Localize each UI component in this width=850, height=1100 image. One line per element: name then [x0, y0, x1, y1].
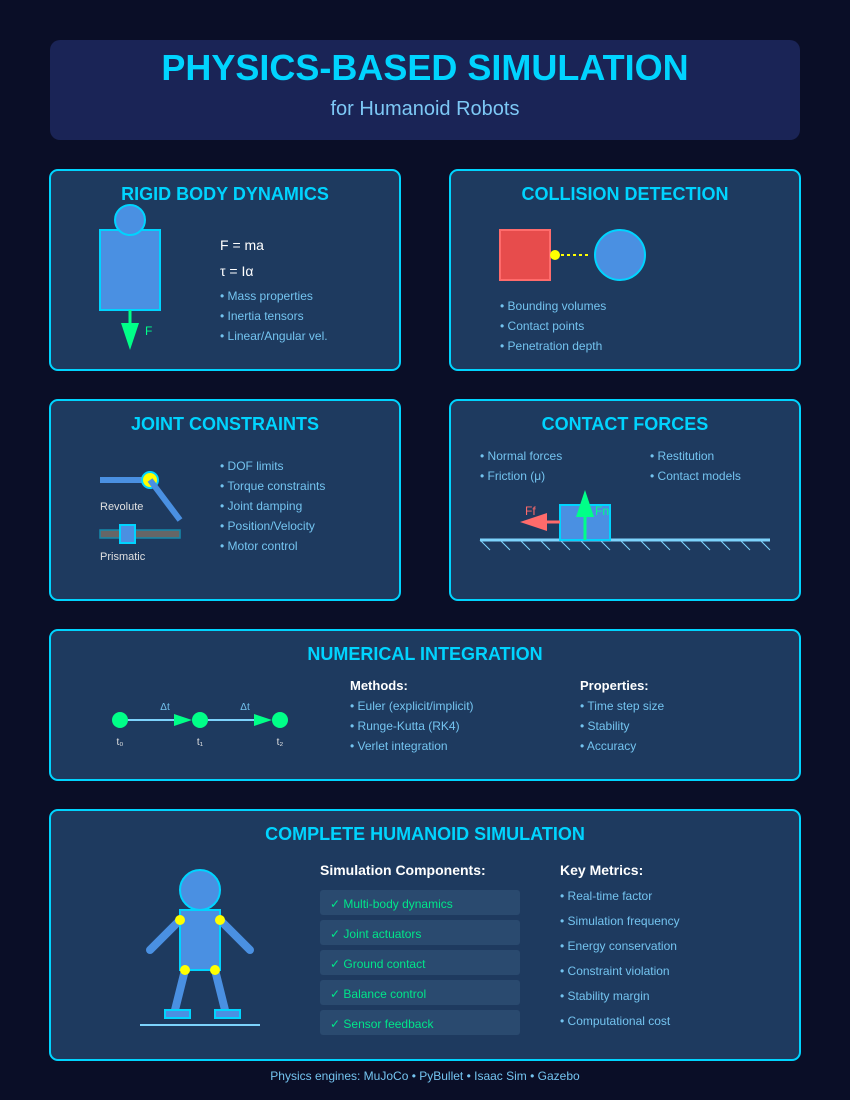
footer: Physics engines: MuJoCo • PyBullet • Isaac Sim • Gazebo	[270, 1069, 580, 1083]
bullet list: rigid body properties: • Inertia tensors	[220, 309, 304, 323]
checklist: simulation components: ✓ Ground contact	[330, 957, 426, 971]
diagram: integration time steps: t₁	[197, 737, 204, 748]
checklist: simulation components: ✓ Sensor feedback	[330, 1017, 434, 1031]
text block: key metrics: • Constraint violation	[560, 964, 670, 978]
text block: methods: • Euler (explicit/implicit)	[350, 699, 474, 713]
text block: methods	[350, 678, 474, 753]
bullet list: rigid body properties	[220, 289, 328, 343]
icon: prismatic joint	[100, 525, 180, 563]
diagram: block on ground with forces	[480, 490, 770, 550]
header banner	[50, 40, 800, 140]
text block: key metrics	[560, 862, 680, 1028]
bullet list: joints	[220, 459, 325, 553]
bullet list: contact right: • Restitution	[650, 449, 714, 463]
bullet list: rigid body properties: • Mass properties	[220, 289, 313, 303]
checklist: simulation components: ✓ Balance control	[330, 987, 426, 1001]
text block: key metrics: • Real-time factor	[560, 889, 652, 903]
diagram: integration time steps: Δt	[160, 702, 170, 713]
bullet list: joints: • Torque constraints	[220, 479, 325, 493]
icon: rigid body with force arrow	[100, 205, 160, 350]
panel: collision detection	[450, 170, 800, 370]
icon: humanoid robot figure	[140, 870, 260, 1025]
bullet list: joints: • Motor control	[220, 539, 298, 553]
text block: methods: • Verlet integration	[350, 739, 448, 753]
bullet list: contact left	[480, 449, 562, 483]
bullet list: joints: • Position/Velocity	[220, 519, 315, 533]
text block: key metrics: • Simulation frequency	[560, 914, 680, 928]
text block: key metrics: • Energy conservation	[560, 939, 677, 953]
diagram: integration time steps	[112, 702, 288, 748]
text block: properties: • Time step size	[580, 699, 665, 713]
panel: joint constraints	[50, 400, 400, 600]
heading: numerical integration: NUMERICAL INTEGRATION	[307, 644, 543, 664]
heading: contact forces: CONTACT FORCES	[542, 414, 708, 434]
heading: joint constraints: JOINT CONSTRAINTS	[131, 414, 319, 434]
text block: methods: Methods:	[350, 678, 408, 693]
panel: numerical integration	[50, 630, 800, 780]
bullet list: rigid body properties: • Linear/Angular vel.	[220, 329, 328, 343]
diagram: integration time steps: t₀	[117, 737, 123, 748]
heading: rigid body dynamics: RIGID BODY DYNAMICS	[121, 184, 329, 204]
panel: complete humanoid simulation	[50, 810, 800, 1060]
bullet list: joints: • Joint damping	[220, 499, 302, 513]
bullet list: contact left: • Friction (μ)	[480, 469, 545, 483]
text block: properties: • Stability	[580, 719, 630, 733]
equations	[220, 237, 264, 279]
diagram: block on ground with forces: Fn	[595, 504, 609, 518]
icon: rigid body with force arrow: F	[145, 324, 152, 338]
checklist: simulation components	[320, 862, 520, 1035]
equations: τ = Iα	[220, 263, 253, 279]
diagram: integration time steps: Δt	[240, 702, 250, 713]
text block: properties: Properties:	[580, 678, 649, 693]
checklist: simulation components: ✓ Joint actuators	[330, 927, 421, 941]
icon: revolute joint	[100, 472, 180, 520]
bullet list: collision: • Contact points	[500, 319, 584, 333]
panel: contact forces	[450, 400, 800, 600]
icon: prismatic joint: Prismatic	[100, 551, 146, 563]
text block: properties: • Accuracy	[580, 739, 636, 753]
title: PHYSICS-BASED SIMULATION	[161, 47, 689, 88]
text block: properties	[580, 678, 665, 753]
bullet list: collision: • Penetration depth	[500, 339, 602, 353]
text block: key metrics: • Stability margin	[560, 989, 650, 1003]
icon: revolute joint: Revolute	[100, 501, 143, 513]
subtitle: for Humanoid Robots	[331, 98, 519, 120]
diagram: block on ground with forces: Ff	[525, 504, 536, 518]
text block: key metrics: Key Metrics:	[560, 862, 643, 878]
bullet list: joints: • DOF limits	[220, 459, 284, 473]
bullet list: contact right: • Contact models	[650, 469, 741, 483]
heading: collision detection: COLLISION DETECTION	[522, 184, 728, 204]
checklist: simulation components: ✓ Multi-body dynamics	[330, 897, 453, 911]
bullet list: collision: • Bounding volumes	[500, 299, 606, 313]
text block: methods: • Runge-Kutta (RK4)	[350, 719, 460, 733]
checklist: simulation components: Simulation Components:	[320, 862, 486, 878]
bullet list: collision	[500, 299, 606, 353]
text block: key metrics: • Computational cost	[560, 1014, 671, 1028]
panel: rigid body dynamics	[50, 170, 400, 370]
heading: complete humanoid simulation: COMPLETE HUMANOID SIMULATION	[265, 824, 585, 844]
bullet list: contact right	[650, 449, 741, 483]
icon: box and sphere collision	[500, 230, 645, 280]
diagram: integration time steps: t₂	[277, 737, 283, 748]
equations: F = ma	[220, 237, 264, 253]
bullet list: contact left: • Normal forces	[480, 449, 562, 463]
